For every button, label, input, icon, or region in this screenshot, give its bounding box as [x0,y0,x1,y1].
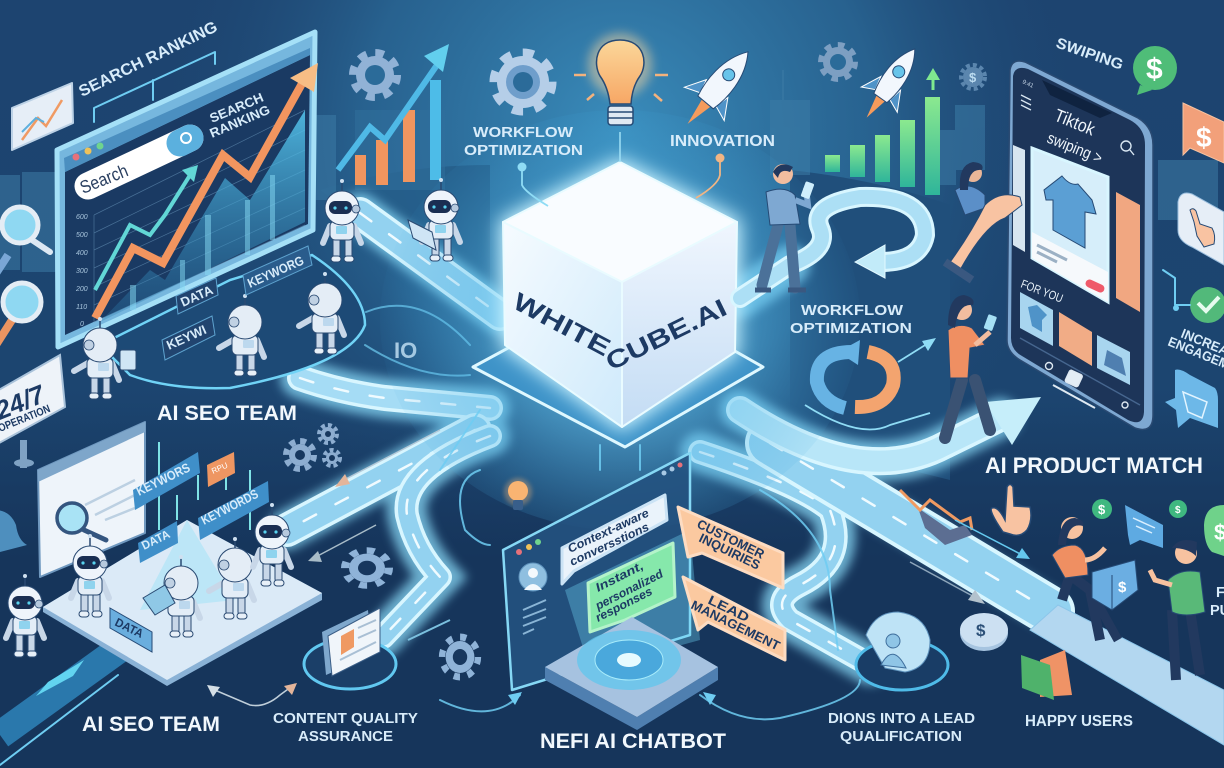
browser screen [65,55,310,335]
cube right face [622,222,737,427]
cube brand name: CUBE.AI [601,294,731,376]
icon: shopping bags [1021,650,1072,700]
bubble: customer inquiries [678,507,783,588]
chip: keywords two: KEYWORDS [199,486,261,528]
bubble: personalized responses: Instant, [593,559,646,595]
app title: swiping > [1045,130,1105,167]
app title: Tiktok [1052,105,1099,140]
road: left middle [300,378,490,408]
search glyph [1121,141,1134,155]
y axis labels: 600 [76,214,88,221]
cube platform [473,320,763,447]
search bar: Search [77,160,131,198]
hand swiping woman [945,162,1022,280]
road: arrow to phone [740,397,1041,461]
icon: dollar pin small [1169,500,1187,518]
icon: green check [1163,270,1224,323]
connector: search ranking bracket [94,52,215,122]
heading: innovation: INNOVATION [670,133,775,150]
woman figure [955,162,985,215]
label: cropped purchase [1210,585,1224,619]
shopping bag: $ [1118,579,1127,596]
person: seated woman with bag [1052,517,1138,640]
bubble: personalized responses: responses [593,584,655,625]
heading: workflow optimization right [790,302,912,337]
arrow: two way curve [207,683,297,706]
person: man walking [755,164,814,290]
panel: seo arena ring [100,255,470,388]
robot standing front [6,574,44,657]
heading: lead qualification: DIONS INTO A LEAD [828,711,975,727]
browser title strip [64,48,310,172]
bubble: lead management: LEAD [706,592,752,625]
connectors: cube callouts [518,154,724,206]
heading: workflow optimization right: OPTIMIZATION [790,320,912,337]
icon: rocket top right [849,36,933,130]
y axis labels: 200 [75,286,88,293]
bars [355,80,441,185]
road: lower left [0,650,118,765]
product card [1032,148,1108,302]
icon: small chart card [12,83,73,150]
panel: phone: 9:41 [1021,79,1035,90]
chart bars [130,175,275,310]
robot front right [253,503,291,586]
phone screen [1011,68,1145,422]
icon: cart speech bubble [1165,370,1218,428]
side card right [1116,192,1140,312]
icon: hand tap card [1178,193,1224,265]
heading: AI SEO team middle: AI SEO TEAM [157,402,297,425]
chip: tag orange: RPU [210,461,229,476]
arrow: diagonal to gears [335,430,440,487]
chip: data sign: DATA [113,615,146,641]
bubble: context aware: conversstions [567,520,652,569]
chip: keywords one: KEYWORS [134,460,193,499]
heading: search ranking top: SEARCH RANKING [76,19,220,101]
bubble: personalized responses: personalized [592,566,666,613]
bubble: personalized responses [588,543,675,632]
bubble: context aware [562,495,667,584]
heading: content quality assurance [273,711,418,745]
panel: phone [1007,61,1153,429]
arrows: road markers [910,520,1030,604]
chip: data bubble: DATA [139,527,173,553]
y axis labels [75,214,88,328]
arm and hand [948,195,1022,270]
icon: dollar pin green [1092,499,1112,519]
icon: chat bubble left [0,510,27,552]
heading: workflow optimization top: OPTIMIZATION [464,142,583,159]
panel: AI SEO platform [6,422,322,686]
icon: magnifier upper [0,207,50,275]
inner label search ranking: RANKING [207,102,272,141]
bubble: lead management: MANAGEMENT [689,597,782,653]
icon: cart bubble [1125,505,1163,548]
heading: workflow optimization top [464,124,583,159]
chip: tag orange [207,452,235,487]
beam [565,530,700,670]
icon: orange dollar bubble [1183,103,1224,163]
bubble: lead management [683,577,785,660]
icon: gear flat [345,550,389,586]
icon: magnifier lower [0,283,41,345]
heading: AI SEO team bottom: AI SEO TEAM [82,713,220,736]
cube brand name [508,288,731,376]
spiral workflow road [740,197,925,298]
arrows: double road markers [308,525,450,640]
icon: cat on road [900,490,972,545]
road network [0,213,1050,765]
y axis labels: 400 [76,250,88,257]
road: to product platform [770,443,1050,611]
icon: coin: $ [976,621,986,640]
rising arrows [159,442,250,530]
chip: data bubble [138,521,178,563]
icon: dollar bubble edge [1204,505,1224,556]
icon: dollar pin small: $ [1175,505,1181,516]
icon: light bulb [574,33,668,162]
robot back keywords [219,294,264,376]
icon: dollar gear: $ [969,70,977,85]
phone body [1007,61,1153,429]
heading: lead qualification [828,711,975,745]
bubble: context aware: Context-aware [565,506,651,556]
app title [1045,105,1105,167]
icon: gear chatbot [442,637,478,677]
inner label search ranking: SEARCH [207,90,266,126]
for you label: FOR YOU [1019,277,1065,306]
cube top face [503,162,737,282]
projector base [545,617,718,730]
icon: green dollar bubble: $ [1146,53,1163,86]
icon: workflow gear top [494,53,552,111]
icon: gear cluster [286,425,340,469]
y axis labels: 500 [76,232,88,239]
connectors: chatbot flow lines [440,410,860,719]
chip: keyword upper: KEYWORG [245,253,306,291]
cube brand name: WHITE [508,288,615,362]
icon: rocket top [668,35,768,141]
platform slab [43,520,322,686]
search window [38,422,145,577]
top left chart [338,44,449,185]
road: to SEO platform [287,430,475,530]
sign: 24/7 operation [0,355,65,468]
chip: keyword lower: KEYWI [164,322,209,353]
chart: green bars [825,68,940,195]
robot back data [299,272,344,354]
heading: AI product match: AI PRODUCT MATCH [985,453,1203,478]
icon: coin [960,613,1008,651]
chat lines [523,600,546,634]
panel: nefi chat window [503,453,785,730]
heading: swiping: SWIPING [1054,35,1125,74]
road: winding left [383,436,490,637]
cube halo [503,162,737,427]
chip: data sign [110,608,152,652]
nav bar [1020,338,1140,408]
panel: search ranking browser [57,32,318,347]
t-shirt [1044,176,1096,248]
search bar [77,133,191,198]
chart teal line [95,172,192,290]
robot with laptop back [143,555,200,637]
chip: data: DATA [178,282,216,310]
panel: product platform [1030,605,1224,745]
heading: nefi ai chatbot: NEFI AI CHATBOT [540,730,726,753]
heading: workflow optimization top: WORKFLOW [473,124,574,141]
background skyline [0,70,1218,272]
icon: orange dollar bubble: $ [1196,122,1212,153]
person: man in green [1150,540,1205,680]
icon: gear top left [353,53,397,97]
bubble: customer inquiries: CUSTOMER [695,516,767,562]
heading: content quality assurance: CONTENT QUALITY [273,711,418,727]
chart area [100,110,305,322]
icon: green dollar bubble [1133,46,1177,95]
icon: dollar pin green: $ [1098,502,1106,517]
icon: gear top right [821,45,855,79]
central cube [380,110,860,530]
robot sitting [71,534,109,617]
light beam [140,520,235,610]
chip: data [176,278,218,314]
inner label search ranking [207,90,272,141]
y axis labels: 300 [76,268,88,275]
chip: keyword lower [162,316,215,360]
thumbnails [1020,292,1130,385]
notch [1042,80,1112,118]
side card left [1013,145,1025,252]
cube glow [380,110,860,530]
avatar [519,563,547,591]
icon: lead cloud [856,612,948,690]
heading: content quality assurance: ASSURANCE [298,729,393,745]
bubble: customer inquiries: INQUIRIES [697,530,763,573]
cube left face [503,222,622,427]
trend arrow [338,65,437,170]
heading: workflow optimization right: WORKFLOW [801,302,904,319]
chart grid [94,110,305,322]
browser frame [57,32,315,347]
icon: dollar gear [961,65,985,89]
heading: happy users: HAPPY USERS [1025,713,1133,730]
road: winding right [700,452,870,665]
icon: cycle arrows [817,340,894,408]
robot pointing [323,179,361,262]
road: upper left [360,213,500,315]
arrow: to woman [805,338,936,430]
text: IO glyph: IO [394,338,417,363]
robot gesturing [209,537,254,619]
icon: small bulb [504,478,532,510]
person: woman with phone orange [945,295,997,438]
heading: lead qualification: QUALIFICATION [840,729,962,745]
screen [503,453,690,690]
robot with laptop [408,178,460,261]
y axis labels: 110 [76,304,87,311]
icon: pointing hand [991,484,1031,535]
robot tablet [74,317,136,399]
y axis labels: 0 [80,321,84,328]
icon: quality document [304,608,396,689]
robots top left [74,178,460,399]
chart orange trend arrow [95,80,304,318]
